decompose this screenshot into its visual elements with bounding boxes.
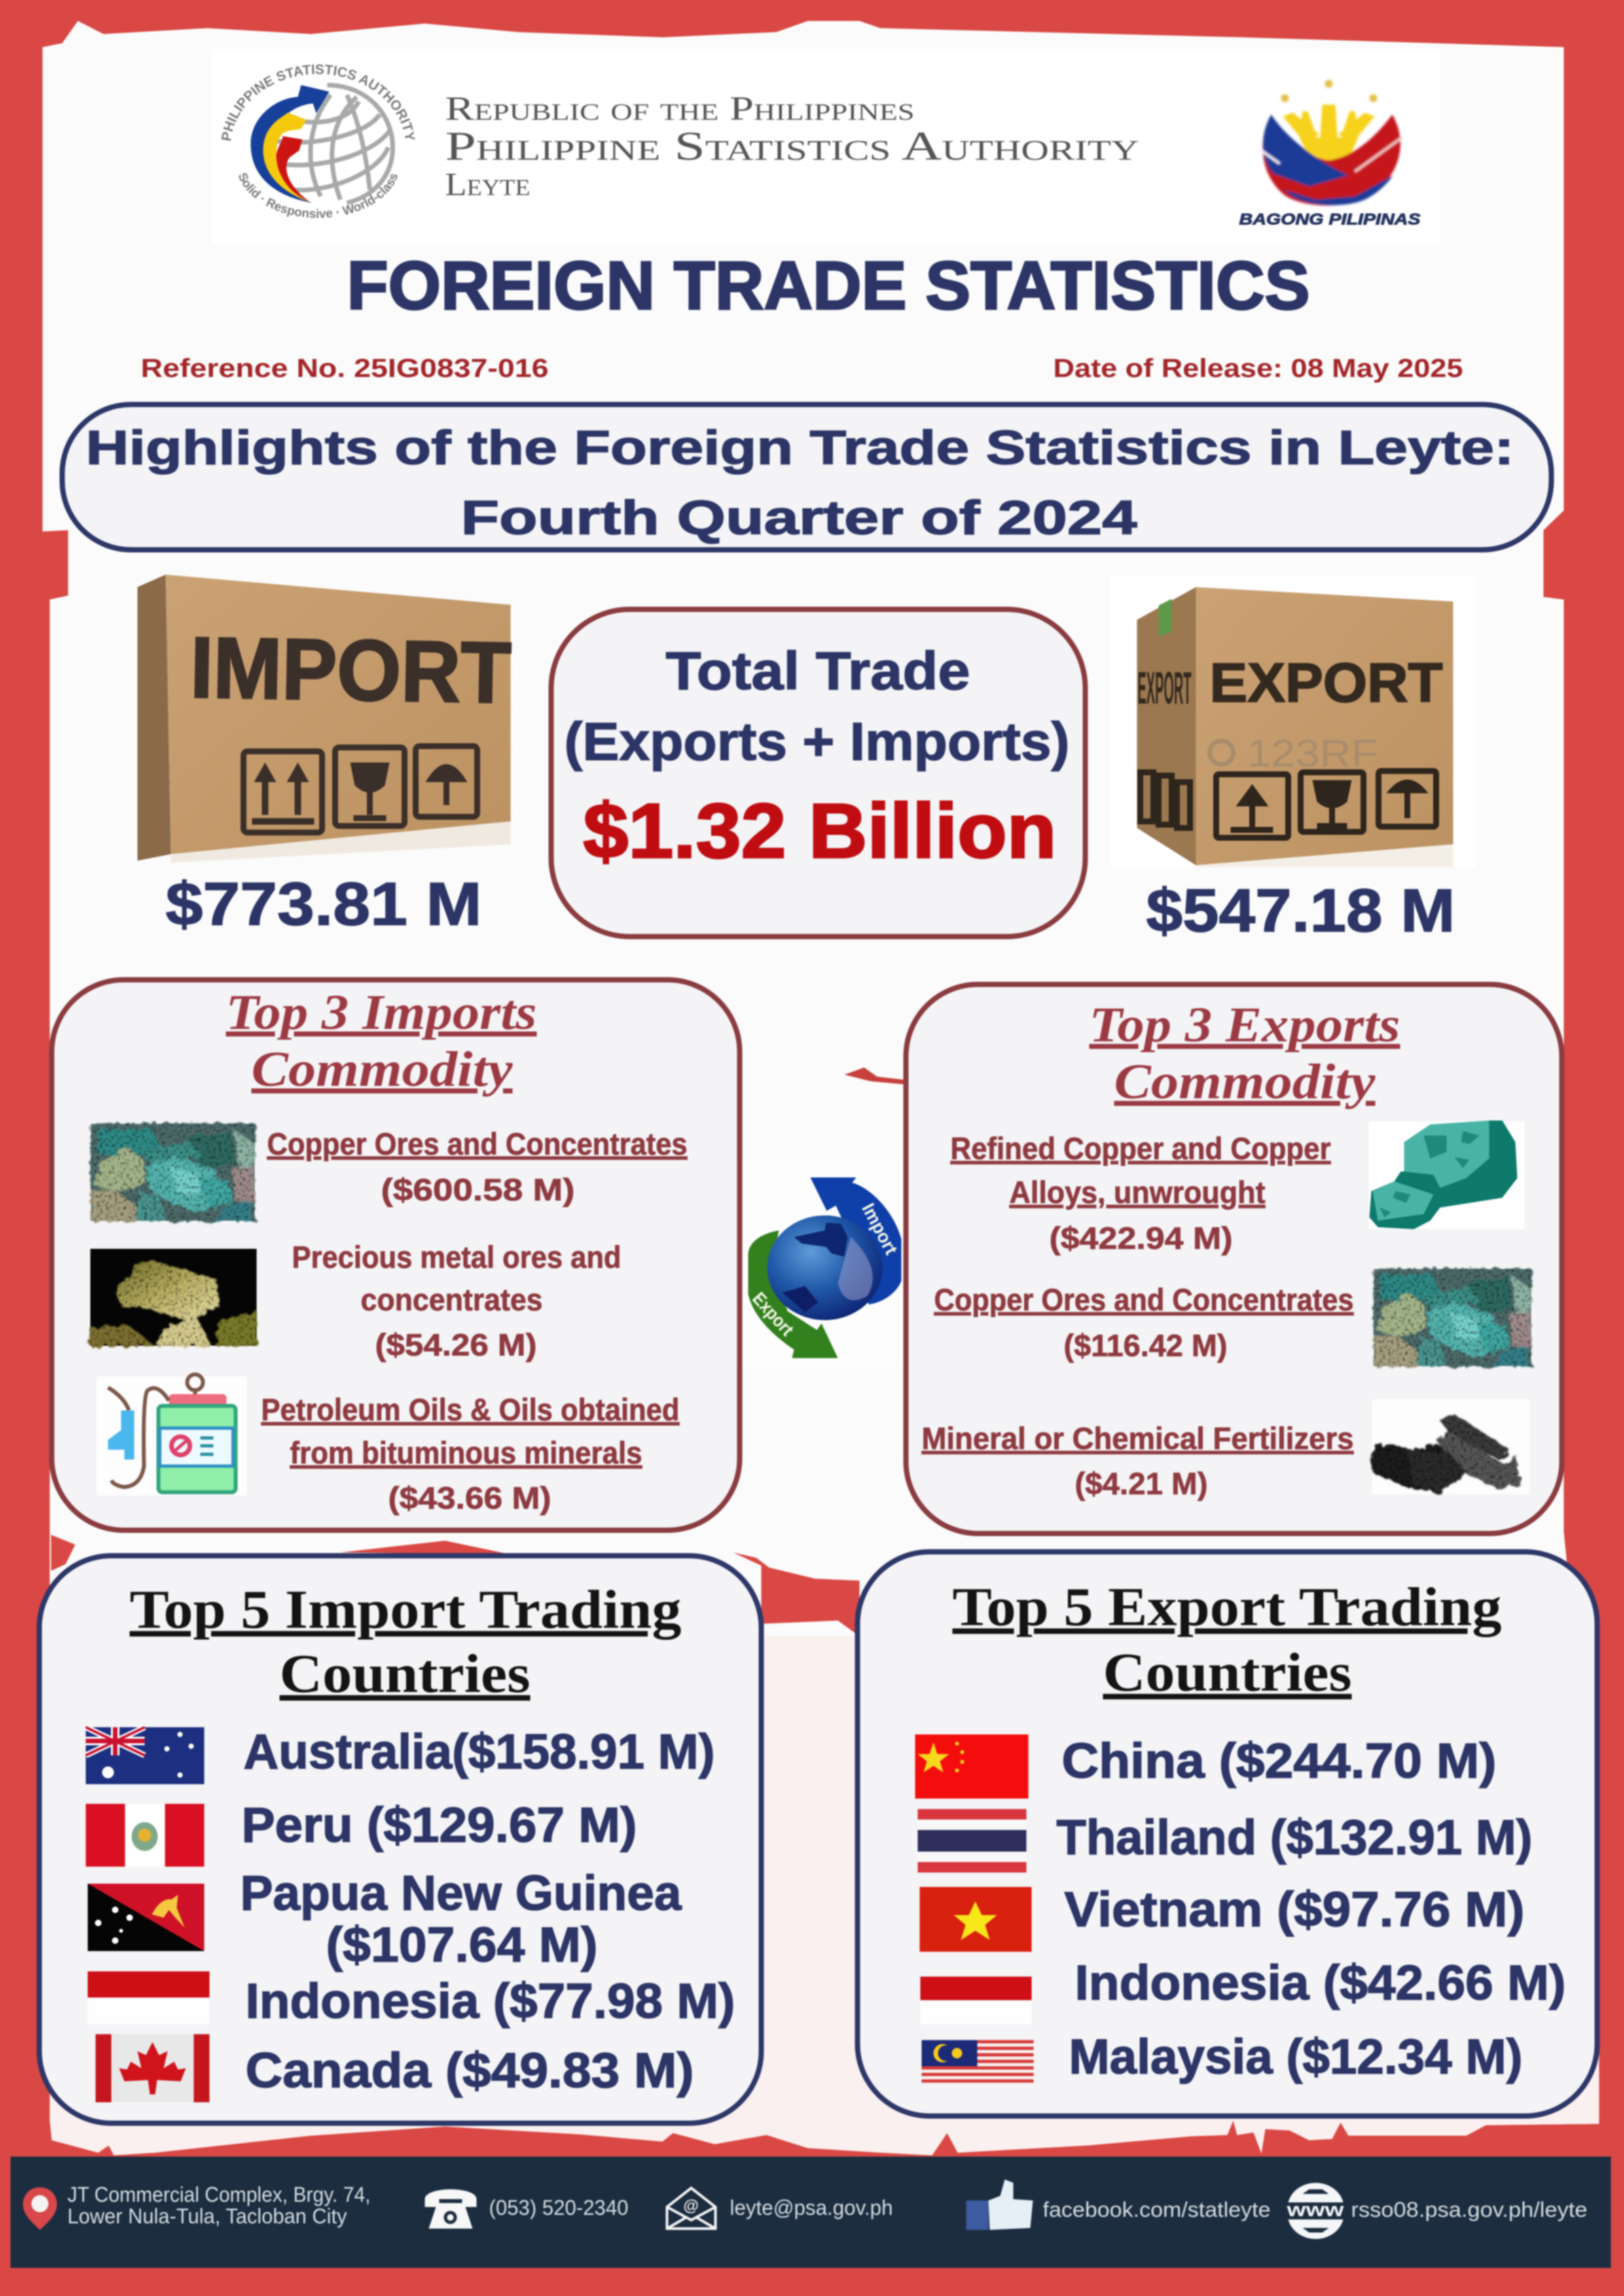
heading: [952, 1577, 1502, 1703]
flag: Malaysia: [922, 2040, 1034, 2085]
icon: telephone: [425, 2189, 477, 2229]
subtitle pill: Highlights of the Foreign Trade Statistics in Leyte:: [86, 422, 1514, 475]
image: copper ore: [1374, 1269, 1531, 1366]
label: Indonesia: Indonesia ($77.98 M): [245, 1973, 735, 2028]
facebook: facebook.com/statleyte: [1043, 2198, 1271, 2221]
image: coal: [1372, 1399, 1530, 1494]
email: leyte@psa.gov.ph: [730, 2196, 893, 2219]
item: precious metal ores: [292, 1240, 621, 1362]
flag: Vietnam: [920, 1887, 1032, 1952]
flag: Indonesia: [88, 1971, 209, 2024]
heading: Top 5 Export Trading: [952, 1577, 1502, 1638]
image: gold ore: [90, 1249, 257, 1346]
heading: Countries: [280, 1643, 530, 1704]
flag: Papua New Guinea: [88, 1884, 204, 1951]
subtitle pill: Fourth Quarter of 2024: [461, 492, 1138, 545]
import box image: [137, 575, 512, 863]
logo: Philippine Statistics Authority: [220, 63, 416, 219]
item: petroleum oils: from bituminous minerals: [290, 1435, 642, 1470]
icon: envelope: @: [683, 2197, 698, 2215]
flag: Australia: [86, 1727, 204, 1784]
image: refined copper lump: [1369, 1121, 1525, 1229]
export value: $547.18 M: [1146, 876, 1455, 944]
import value: $773.81 M: [166, 870, 482, 938]
item: copper ores and concentrates: Copper Ores and Concentrates: [267, 1126, 687, 1161]
import box image: IMPORT: [190, 619, 512, 721]
logo: Bagong Pilipinas: BAGONG PILIPINAS: [1239, 211, 1420, 228]
item: copper ores and concentrates: [267, 1126, 687, 1207]
label: Canada: Canada ($49.83 M): [245, 2043, 694, 2098]
agency name text: Leyte: [445, 166, 530, 202]
item: mineral or chemical fertilizers: ($4.21 M): [1075, 1466, 1208, 1501]
release date: Date of Release: 08 May 2025: [1053, 354, 1463, 383]
label: Malaysia: Malaysia ($12.34 M): [1069, 2029, 1523, 2084]
export box image: EXPORT: [1138, 662, 1191, 713]
heading: [226, 985, 537, 1097]
item: refined copper: Alloys, unwrought: [1009, 1175, 1265, 1210]
subtitle pill: [62, 404, 1551, 550]
logo: Philippine Statistics Authority: Solid · Responsive · World-class: [238, 172, 398, 219]
flag: China: [915, 1734, 1028, 1799]
agency name text: Republic of the Philippines: [445, 90, 914, 128]
heading: [130, 1579, 681, 1704]
icon: import export globe: Export: [749, 1288, 798, 1340]
total trade panel: Total Trade: [666, 641, 970, 701]
item: petroleum oils: Petroleum Oils & Oils obtained: [261, 1392, 679, 1427]
item: refined copper: [950, 1131, 1331, 1255]
heading: Top 3 Exports: [1089, 997, 1400, 1052]
item: mineral or chemical fertilizers: [922, 1421, 1354, 1501]
reference number: Reference No. 25IG0837-016: [141, 354, 549, 383]
icon: envelope: [667, 2188, 715, 2229]
item: copper ores and concentrates: ($116.42 M): [1064, 1328, 1227, 1363]
item: petroleum oils: ($43.66 M): [388, 1480, 551, 1515]
item: precious metal ores: Precious metal ores and: [292, 1240, 621, 1274]
item: refined copper: Refined Copper and Copper: [950, 1131, 1331, 1166]
label: Australia: Australia($158.91 M): [244, 1724, 715, 1779]
item: precious metal ores: ($54.26 M): [375, 1327, 537, 1362]
item: refined copper: ($422.94 M): [1049, 1221, 1233, 1255]
agency name text: Philippine Statistics Authority: [445, 124, 1139, 169]
label: Peru: Peru ($129.67 M): [242, 1797, 637, 1852]
export box image: 123RF: [1247, 732, 1378, 775]
icon: www globe: [1286, 2183, 1344, 2239]
heading: [1089, 997, 1400, 1109]
heading: Commodity: [251, 1042, 513, 1097]
label: Vietnam: Vietnam ($97.76 M): [1064, 1882, 1525, 1937]
flag: Indonesia: [920, 1977, 1032, 2024]
label: Papua New Guinea: [240, 1865, 682, 1972]
total trade panel: [551, 609, 1085, 937]
icon: www globe: www: [1286, 2199, 1344, 2221]
footer bar: [10, 2157, 1611, 2268]
item: petroleum oils: [261, 1392, 679, 1515]
icon: location pin: [23, 2187, 57, 2230]
panel: top 3 imports commodity: [52, 980, 740, 1530]
icon: import export globe: Import: [858, 1200, 902, 1258]
address: [67, 2183, 370, 2228]
address: JT Commercial Complex, Brgy. 74,: [67, 2183, 370, 2206]
website: rsso08.psa.gov.ph/leyte: [1351, 2198, 1587, 2221]
item: mineral or chemical fertilizers: Mineral or Chemical Fertilizers: [922, 1421, 1354, 1456]
heading: Top 5 Import Trading: [130, 1579, 681, 1640]
total trade panel: $1.32 Billion: [583, 788, 1056, 874]
image: copper ore: [91, 1124, 255, 1221]
item: precious metal ores: concentrates: [361, 1282, 543, 1317]
icon: petroleum pump: [96, 1374, 247, 1496]
title: FOREIGN TRADE STATISTICS: [347, 248, 1310, 324]
label: China: China ($244.70 M): [1062, 1733, 1496, 1788]
export box image: EXPORT: [1210, 652, 1443, 713]
phone number: (053) 520-2340: [489, 2196, 628, 2219]
label: Thailand: Thailand ($132.91 M): [1056, 1810, 1532, 1865]
icon: import export globe: [742, 1158, 906, 1368]
header banner: [220, 63, 1422, 228]
logo: Philippine Statistics Authority: PHILIPPINE STATISTICS AUTHORITY: [220, 63, 416, 141]
label: Papua New Guinea: Papua New Guinea: [240, 1865, 682, 1920]
agency name text: [445, 90, 1139, 202]
flag: Canada: [96, 2034, 209, 2102]
total trade panel: (Exports + Imports): [564, 712, 1070, 772]
address: Lower Nula-Tula, Tacloban City: [67, 2204, 347, 2228]
label: Indonesia: Indonesia ($42.66 M): [1075, 1955, 1566, 2010]
flag: Thailand: [918, 1809, 1026, 1873]
item: copper ores and concentrates: [934, 1282, 1354, 1363]
label: Papua New Guinea: ($107.64 M): [326, 1917, 598, 1972]
icon: thumbs up: [966, 2179, 1033, 2230]
panel: top 5 import trading countries: [39, 1556, 761, 2123]
heading: Commodity: [1114, 1054, 1375, 1109]
panel: top 5 export trading countries: [857, 1552, 1597, 2116]
item: copper ores and concentrates: Copper Ores and Concentrates: [934, 1282, 1354, 1317]
item: copper ores and concentrates: ($600.58 M): [381, 1172, 575, 1207]
flag: Peru: [86, 1804, 204, 1867]
logo: Bagong Pilipinas: [1239, 80, 1420, 228]
heading: Countries: [1103, 1642, 1352, 1703]
panel: top 3 exports commodity: [906, 984, 1562, 1534]
heading: Top 3 Imports: [226, 985, 537, 1040]
export box image: [1110, 576, 1475, 867]
